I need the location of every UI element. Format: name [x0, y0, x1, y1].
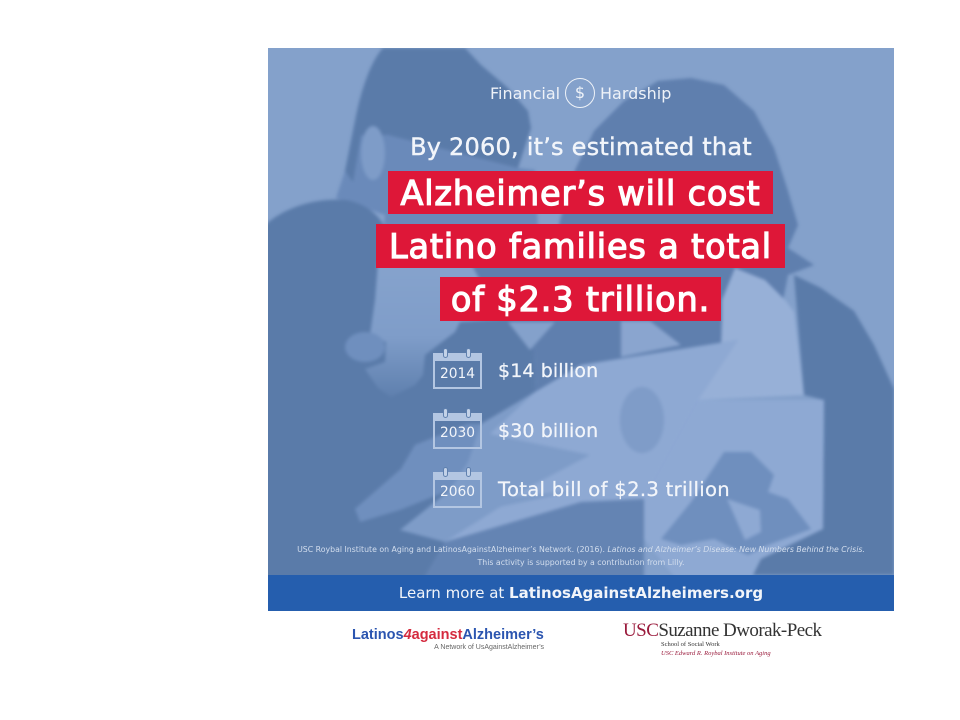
icon: calendar 2014	[433, 349, 482, 389]
headline line 1: Alzheimer’s will cost	[400, 174, 761, 213]
logo school line: School of Social Work	[661, 641, 720, 648]
value 2030: $30 billion	[498, 420, 598, 442]
timeline row 2060	[433, 467, 730, 508]
blue footer bar	[268, 575, 894, 611]
photo background panel	[268, 48, 894, 575]
logo wordmark: Latinos4againstAlzheimer’s	[352, 627, 544, 643]
heading: Financial Hardship	[490, 78, 671, 108]
icon: dollar circle	[565, 78, 595, 108]
timeline row 2030	[433, 409, 598, 449]
headline line 3: of $2.3 trillion.	[451, 280, 710, 319]
icon: dollar circle: $	[575, 83, 585, 102]
heading word: Financial: Financial	[490, 84, 560, 103]
value 2014: $14 billion	[498, 360, 598, 382]
timeline row 2014	[433, 349, 598, 389]
icon: calendar 2014: 2014	[440, 366, 475, 382]
citation	[297, 545, 865, 566]
value 2060: Total bill of $2.3 trillion	[498, 478, 730, 501]
logo wordmark: USCSuzanne Dworak-Peck	[623, 620, 821, 641]
citation: USC Roybal Institute on Aging and LatinosAgainstAlzheimer’s Network. (2016). Latinos and Alzheimer’s Disease: New Numbers Behind the Crisis.	[297, 545, 865, 554]
icon: calendar 2030: 2030	[440, 425, 475, 441]
logo: USC Suzanne Dworak-Peck	[623, 620, 822, 657]
headline line 2: Latino families a total	[389, 227, 772, 266]
lead text: By 2060, it’s estimated that	[410, 133, 752, 161]
learn more text: Learn more at LatinosAgainstAlzheimers.org	[399, 584, 763, 602]
icon: calendar 2030	[433, 409, 482, 449]
citation: This activity is supported by a contribution from Lilly.	[478, 558, 684, 566]
logo tagline: A Network of UsAgainstAlzheimer’s	[434, 644, 544, 651]
icon: calendar 2060	[433, 467, 482, 508]
heading word: Hardship: Hardship	[600, 84, 671, 103]
logo institute line: USC Edward R. Roybal Institute on Aging	[661, 650, 771, 657]
icon: calendar 2060: 2060	[440, 484, 475, 500]
logo: Latinos Against Alzheimer's	[352, 627, 544, 651]
